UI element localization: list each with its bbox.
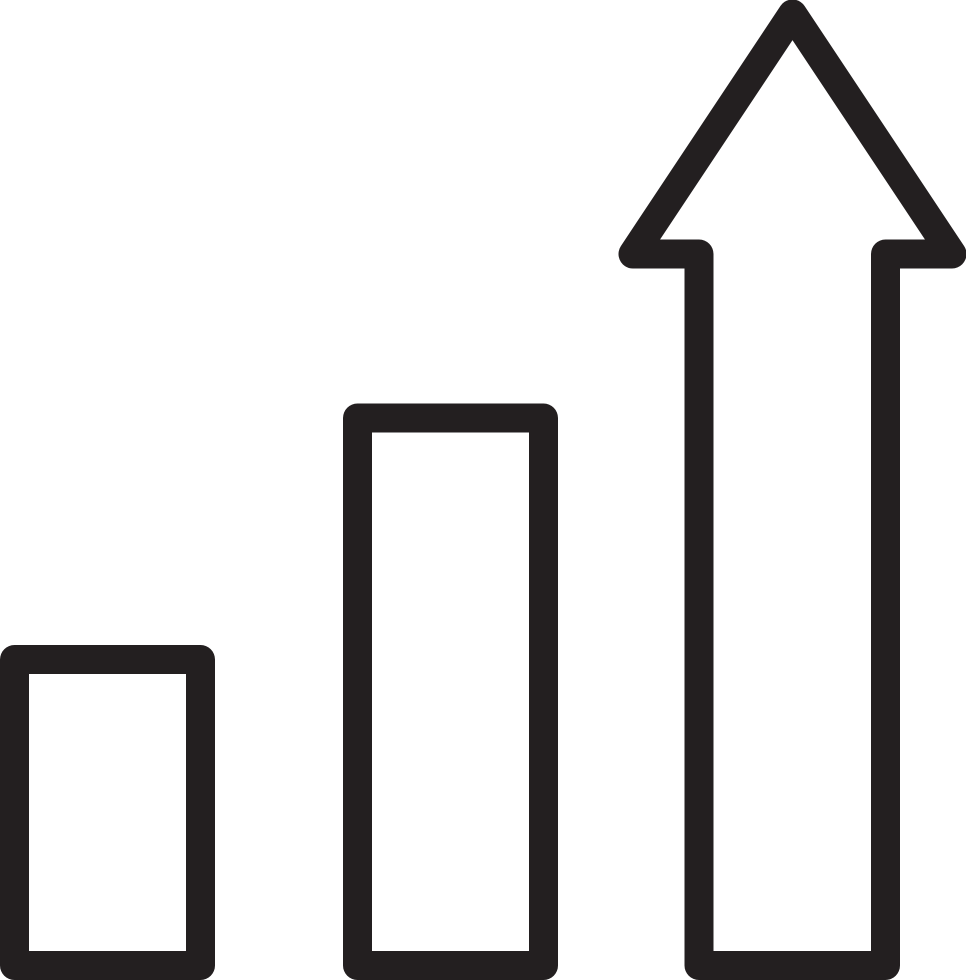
arrow [633,14,952,966]
small bar [14,660,200,966]
medium bar [358,418,544,966]
